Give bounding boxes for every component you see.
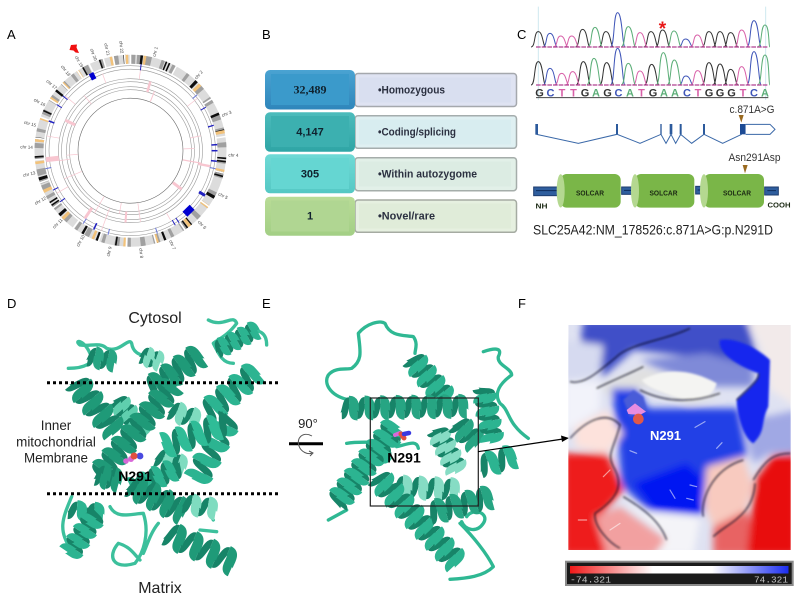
base call letters: A	[671, 88, 679, 100]
icon: red asterisk: *	[659, 19, 667, 40]
base call letters: C	[750, 88, 758, 100]
concentric data tracks	[46, 66, 216, 236]
protein domain model	[534, 165, 778, 208]
base call letters: T	[559, 88, 566, 100]
row: Within autozygome	[265, 154, 516, 193]
chromosome labels: chr 15	[23, 120, 37, 128]
chromosome ideogram ring	[34, 54, 226, 248]
protein labels: SOLCAR	[650, 188, 678, 198]
chromosome labels: chr 6	[197, 219, 208, 230]
panel F: electrostatic surface	[563, 320, 797, 586]
label: c.871A>G: c.871A>G	[730, 104, 774, 116]
chromosome labels: chr 18	[60, 64, 72, 77]
panel E: protein top view	[289, 322, 569, 579]
chromosome labels: chr 19	[74, 55, 85, 69]
base call letters: G	[581, 88, 589, 100]
chromosome labels: chr 7	[168, 239, 177, 251]
base call letters: A	[660, 88, 668, 100]
blue segments	[45, 64, 218, 235]
chromosome labels: chr 12	[34, 195, 48, 206]
label: Matrix: Matrix	[138, 580, 182, 597]
pink homozygosity marks	[46, 69, 210, 231]
icon: 90 degree rotation	[289, 416, 323, 456]
chromosome labels: chr 2	[194, 69, 204, 80]
base call letters: A	[592, 88, 600, 100]
label: N291: N291	[118, 468, 152, 484]
label: N291: N291	[387, 450, 421, 466]
base call letters: G	[727, 88, 736, 100]
base call letters: T	[695, 88, 702, 100]
surface map	[563, 320, 797, 555]
arrow to surface view	[478, 436, 569, 452]
label: Inner mitochondrial Membrane: Inner	[41, 418, 72, 433]
chromosome labels: chr 14	[20, 144, 33, 150]
cartoon ribbon	[63, 320, 267, 572]
label: D: D	[7, 296, 16, 311]
label: Inner mitochondrial Membrane: Membrane	[24, 450, 88, 466]
chromosome labels: chr 13	[23, 170, 36, 178]
chromosome labels: chr 8	[138, 248, 144, 259]
row: Within autozygome: 305	[301, 168, 319, 180]
row: Novel/rare	[265, 197, 516, 236]
base call letters: A	[626, 88, 634, 100]
chromosome labels: chr 21	[103, 43, 111, 57]
panel C: sequence, gene and protein models	[531, 7, 790, 238]
chromosome labels: chr 17	[45, 79, 58, 91]
label: N291: N291	[650, 428, 681, 443]
base call letters: C	[547, 88, 555, 100]
residue N291 spheres	[123, 452, 143, 464]
base call letters: G	[716, 88, 724, 100]
row: Homozygous	[265, 70, 516, 110]
colour scale bar	[566, 562, 793, 586]
label: C: C	[517, 27, 526, 42]
variant notation: SLC25A42:NM_178526:c.871A>G:p.N291D	[533, 222, 773, 238]
protein labels: SOLCAR	[576, 188, 605, 198]
row: Novel/rare: •Novel/rare	[378, 210, 435, 222]
chromosome labels: chr 11	[52, 217, 64, 230]
base call letters: G	[705, 88, 713, 100]
label: Cytosol: Cytosol	[128, 310, 182, 327]
colour scale bar: 74.321	[754, 576, 788, 586]
base call letters: G	[535, 88, 544, 100]
residue N291 sticks	[395, 433, 409, 438]
protein labels: NH	[536, 202, 548, 210]
chromosome labels: chr 16	[33, 97, 47, 108]
membrane boundaries	[47, 383, 281, 494]
row: Homozygous: 32,489	[294, 82, 326, 96]
base call letters: T	[740, 88, 747, 100]
label: A: A	[7, 27, 16, 42]
base call letters: T	[638, 88, 645, 100]
protein labels: COOH	[768, 200, 790, 210]
chromosome labels: chr 3	[221, 109, 233, 118]
base call letters: C	[683, 88, 691, 100]
chromosome labels: chr 5	[217, 191, 229, 201]
base call letters: C	[615, 88, 623, 100]
base call letters: G	[649, 88, 657, 100]
label: Asn291Asp: Asn291Asp	[728, 152, 780, 164]
chromosome labels: chr 10	[75, 234, 86, 247]
cartoon ribbon	[327, 322, 528, 579]
protein labels: SOLCAR	[723, 188, 752, 198]
row: Within autozygome: •Within autozygome	[378, 168, 477, 180]
row: Coding/splicing: 4,147	[296, 126, 324, 138]
base call letters: G	[603, 88, 612, 100]
zoom box	[370, 398, 478, 506]
row: Coding/splicing	[265, 112, 516, 152]
label: F: F	[518, 296, 526, 311]
panel D: protein side view	[16, 310, 281, 597]
label: E: E	[262, 296, 271, 311]
icon: 90 degree rotation: 90°	[298, 416, 318, 431]
chromosome labels	[20, 41, 239, 259]
chromosome labels: chr 4	[228, 152, 239, 158]
base call letters: T	[570, 88, 577, 100]
chromosome labels: chr 9	[106, 246, 113, 257]
base call letters: A	[761, 88, 769, 100]
panel A: circular genome plot	[20, 41, 239, 259]
panel B: variant filtering funnel	[265, 70, 516, 236]
label: Inner mitochondrial Membrane: mitochondrial	[16, 434, 96, 450]
protein labels	[536, 188, 790, 210]
chromatogram traces	[531, 7, 770, 100]
chromosome labels: chr 1	[152, 46, 159, 57]
icon: red arrow marker	[70, 44, 79, 53]
row: Coding/splicing: •Coding/splicing	[378, 126, 456, 138]
colour scale bar: -74.321	[570, 576, 611, 586]
chromosome labels: chr 20	[89, 48, 98, 62]
chromosome labels: chr 22	[118, 41, 125, 54]
row: Homozygous: •Homozygous	[378, 84, 445, 96]
gene model	[535, 115, 775, 143]
row: Novel/rare: 1	[307, 210, 313, 222]
label: B: B	[262, 27, 271, 42]
